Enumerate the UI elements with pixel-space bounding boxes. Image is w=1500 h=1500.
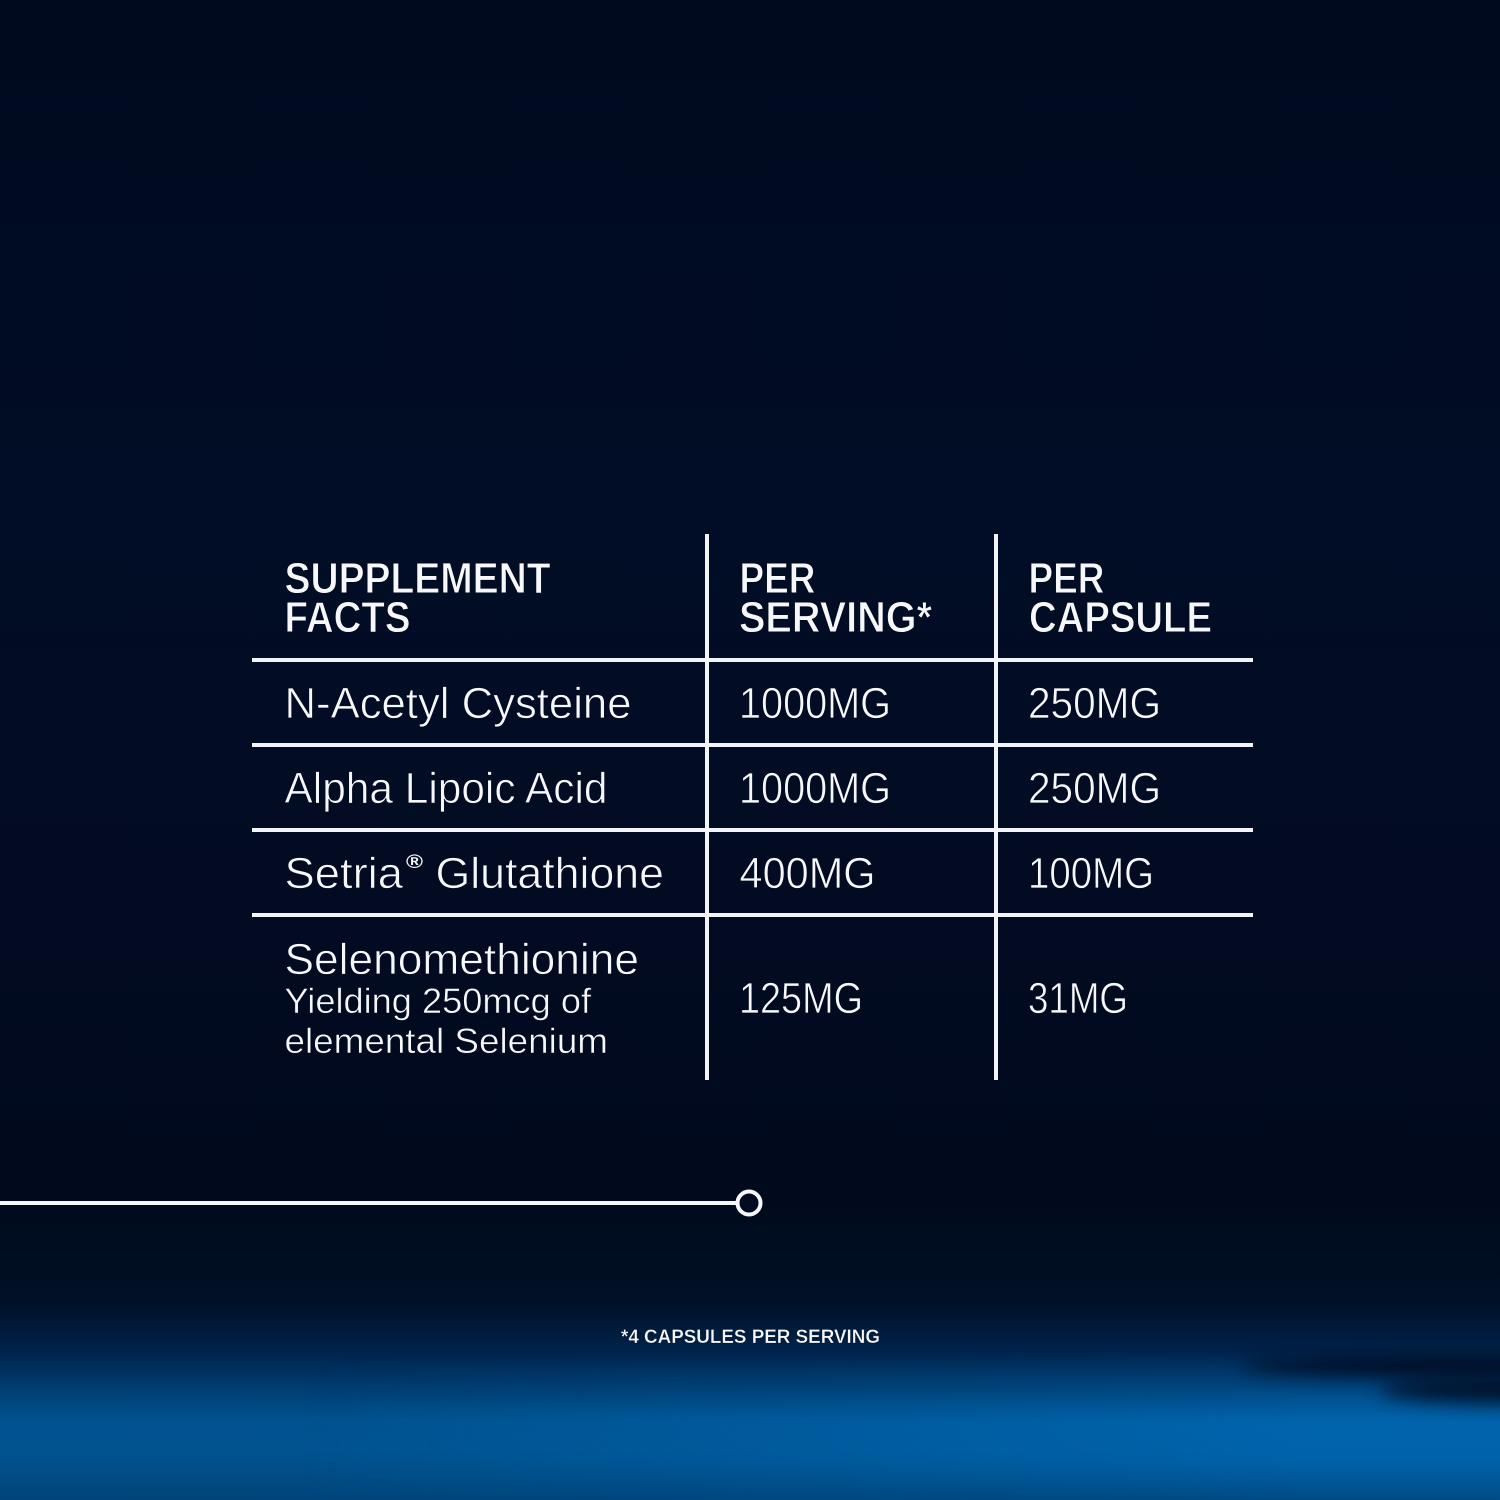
row: N-Acetyl Cysteine: N-Acetyl Cysteine (284, 679, 632, 728)
heading: supplement facts: FACTS (284, 593, 410, 642)
row: Selenomethionine: 125MG (739, 974, 863, 1023)
heading: per capsule (1028, 554, 1212, 642)
row: Setria Glutathione: Setria (284, 849, 404, 898)
row: Setria Glutathione: Glutathione (436, 849, 664, 898)
row: Selenomethionine: Selenomethionine (284, 935, 639, 984)
row: N-Acetyl Cysteine: 250MG (1028, 679, 1161, 728)
row: Alpha Lipoic Acid (284, 764, 1161, 813)
heading: per capsule: CAPSULE (1029, 593, 1212, 642)
table grid lines (252, 534, 1253, 1080)
row: Selenomethionine: Yielding 250mcg of (284, 982, 591, 1021)
heading: per serving: SERVING* (739, 593, 933, 642)
row: Selenomethionine: elemental Selenium (284, 1022, 608, 1061)
heading: per serving: PER (740, 554, 816, 603)
footnote: *4 CAPSULES PER SERVING (621, 1327, 880, 1348)
background (0, 1304, 1500, 1500)
row: Setria Glutathione: 100MG (1028, 849, 1154, 898)
row: Setria Glutathione: 400MG (740, 849, 876, 898)
row: Alpha Lipoic Acid: 250MG (1028, 764, 1161, 813)
heading: supplement facts (284, 554, 551, 642)
heading: per capsule: PER (1028, 554, 1104, 603)
row: Selenomethionine (284, 935, 1128, 1061)
supplement facts table (252, 534, 1253, 1080)
row: N-Acetyl Cysteine: 1000MG (739, 679, 891, 728)
row: Setria Glutathione: ® (406, 852, 423, 873)
heading: per serving (739, 554, 933, 642)
row: Setria Glutathione (284, 849, 1154, 898)
row: Alpha Lipoic Acid: Alpha Lipoic Acid (284, 764, 608, 813)
row: N-Acetyl Cysteine (284, 679, 1161, 728)
timeline connector with circle (0, 1192, 760, 1214)
heading: supplement facts: SUPPLEMENT (284, 554, 551, 603)
row: Selenomethionine: 31MG (1028, 974, 1128, 1023)
row: Alpha Lipoic Acid: 1000MG (739, 764, 891, 813)
